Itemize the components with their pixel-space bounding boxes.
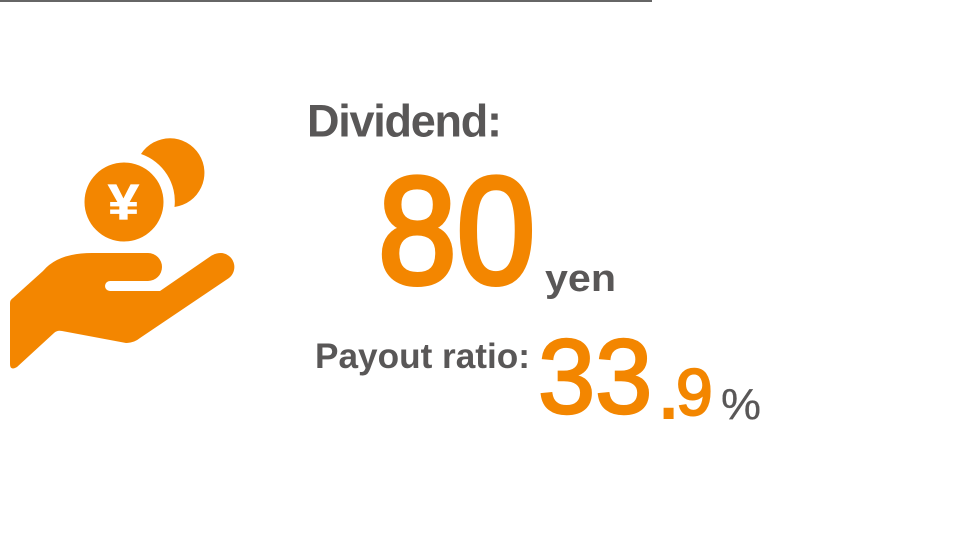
- icon: hand holding yen coins: [10, 138, 234, 368]
- unit: yen: yen: [545, 258, 616, 300]
- value: 9: 9: [676, 355, 713, 429]
- value: 33: 33: [538, 318, 652, 436]
- value: 80: 80: [378, 146, 535, 316]
- front coin with yen sign: [84, 162, 164, 242]
- back coin: [141, 138, 204, 207]
- value: decimal point: .: [654, 325, 683, 442]
- heading: Dividend: Dividend:: [307, 96, 501, 146]
- label: Payout ratio: Payout ratio:: [315, 337, 530, 376]
- front coin with yen sign: ¥: [108, 174, 139, 230]
- hand: [10, 253, 234, 368]
- unit: percent: %: [721, 380, 761, 429]
